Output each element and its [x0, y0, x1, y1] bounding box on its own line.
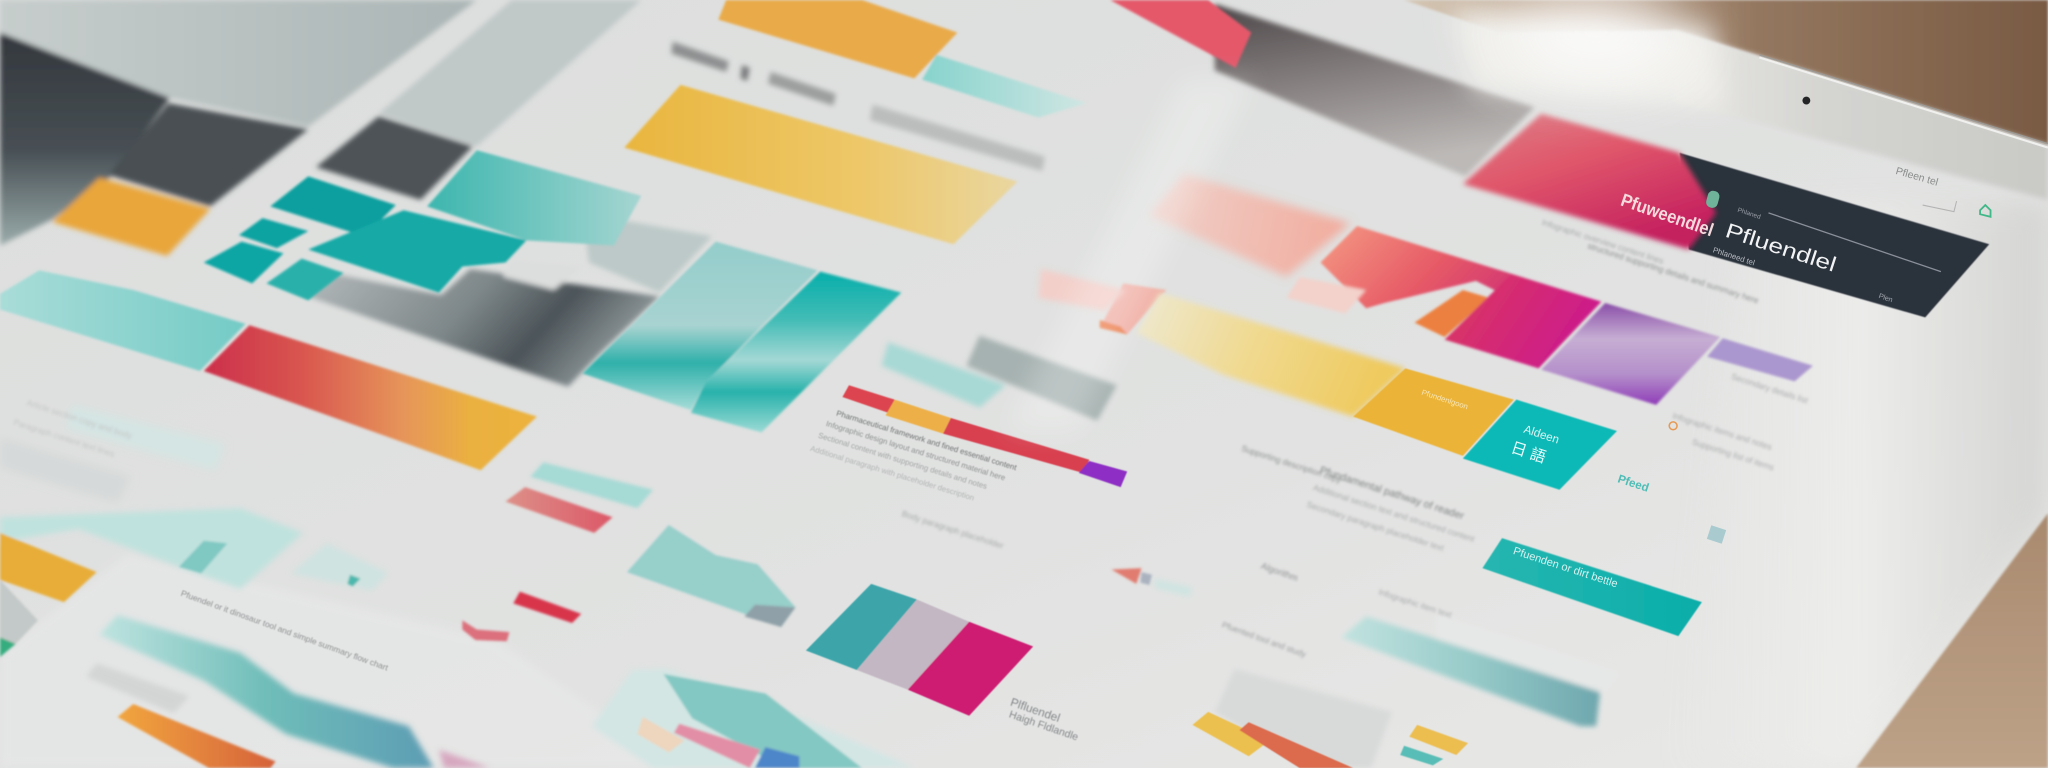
red orange bar: [1240, 722, 1353, 768]
panel: bottom right stacked bars: [1192, 712, 1468, 768]
magenta column: [908, 622, 1033, 716]
panel: left article group: [0, 0, 477, 256]
teal tag: [1400, 746, 1443, 765]
heading: blurred labels: [671, 42, 1045, 171]
pale salmon block: [1149, 174, 1351, 277]
yellow segment: [886, 400, 951, 434]
glare: screen sheen: [1006, 78, 1254, 431]
green tick: [0, 637, 16, 657]
teal tile small b: [204, 242, 283, 283]
panel: mini charts lower centre: [462, 462, 1192, 641]
text: teal tile figure: 日 語: [1509, 439, 1548, 467]
panel: centre-left column photos: [316, 0, 641, 200]
icon: small teal square: [1707, 525, 1726, 544]
amber block: [1353, 368, 1514, 456]
text: teal tile caption: Aldeen: [1522, 423, 1561, 446]
pale teal strip: [922, 55, 1087, 118]
purple block: [1541, 303, 1720, 405]
text block: blurred body copy: Secondary paragraph placeholder text: [1306, 499, 1446, 553]
purple segment: [1079, 461, 1127, 487]
hero dark navy half: [1680, 153, 1989, 317]
panel: teal mosaic: [204, 150, 641, 300]
teal peak: [664, 674, 862, 768]
yellow fade block: [1136, 293, 1405, 417]
text block: blurred body copy: Article section copy and body: [26, 397, 134, 441]
pale text card: [1287, 277, 1366, 313]
hero rule: [1768, 213, 1941, 272]
pink block: [674, 724, 760, 768]
red orange gradient band: [204, 325, 537, 470]
teal blip: [347, 575, 360, 586]
hero dark photo: [0, 33, 170, 246]
yellow bar: [1192, 712, 1270, 756]
gray photo strip: [379, 0, 641, 146]
teal tile large fade: [427, 150, 641, 246]
large yellow block: [624, 85, 1017, 244]
text block: stacked column caption: Haigh Fldlandle: [1007, 709, 1080, 744]
hero small label: Phlaneed tel: [1712, 245, 1756, 268]
icon: green tag: [1705, 190, 1721, 209]
text block: blurred body copy: Supporting list of items: [1691, 436, 1775, 472]
panel: right screen shading: [1672, 202, 2048, 768]
panel: gradient coral and purple row: [1038, 174, 1813, 405]
panel: stacked column trio: [806, 584, 1033, 716]
text block: progress bar description: Additional paragraph with placeholder description: [809, 444, 975, 503]
pale base: [592, 669, 914, 768]
panel: right lower teal chart: [1215, 614, 1620, 768]
darker teal tile: [179, 541, 227, 573]
pale teal chart: [0, 508, 303, 589]
teal band: [1341, 616, 1600, 726]
bezel edge highlight: [1759, 55, 2048, 148]
text block: blurred body copy: Pfuented tool and study: [1221, 619, 1308, 660]
pale mini chart: [291, 543, 388, 590]
orange caption block: [52, 178, 210, 256]
panel: striped progress bar: [842, 385, 1127, 487]
text block: blurred body copy: Secondary details list: [1730, 371, 1810, 406]
panel: wooden table bottom right: [1856, 513, 2048, 768]
amber bar: [0, 533, 97, 602]
note bracket: [1923, 201, 1957, 212]
orange small block: [1415, 290, 1489, 337]
glare: window light: [1505, 0, 1688, 76]
icon: tiny orange swirl: [1669, 422, 1677, 430]
red segment: [842, 385, 895, 413]
panel: top yellow header blocks: [624, 0, 1087, 244]
text block: blurred body copy: Paragraph content text lines: [12, 417, 116, 459]
text block: blurred body copy: Algorithm: [1260, 561, 1299, 583]
panel: red to orange banner: [0, 270, 537, 470]
tiny red mark: [1112, 568, 1142, 584]
pale end: [1155, 579, 1192, 597]
pale highlight block: [503, 260, 583, 290]
panel: hero banner: [1463, 114, 1989, 317]
crimson segment: [943, 418, 1089, 473]
mini chart red: [505, 487, 613, 533]
text block: blurred body copy: Infographic items and notes: [1671, 410, 1773, 452]
text block: progress bar description: Infographic design layout and structured material here: [825, 419, 1006, 482]
text block: progress bar description: [809, 409, 1019, 503]
text: callout label: Pfuenden or dirt bettle: [1512, 545, 1619, 590]
hero red half: [1463, 114, 1716, 249]
teal column: [806, 584, 917, 670]
text block: blurred body copy: [12, 217, 1810, 660]
pale photo block: [583, 213, 712, 293]
pale red text lines: [1038, 269, 1126, 311]
panel: gray photo collage: [308, 213, 712, 387]
gray stub: [0, 580, 38, 644]
text: amber block caption: Pfundenlgoon: [1420, 388, 1469, 411]
pink fragment: [439, 750, 490, 768]
panel: tall teal columns: [583, 242, 901, 432]
panel: bottom rainbow chart: [592, 669, 914, 768]
text block: blurred body copy: structured supporting details and summary here: [1586, 241, 1760, 306]
mini chart teal: [530, 462, 653, 508]
gray card: [86, 664, 189, 713]
text block: stacked column caption: Plfluendel: [1009, 696, 1062, 725]
hero mini label: Phlaned: [1737, 207, 1762, 221]
teal tile small a: [239, 218, 308, 248]
panel: lower left wave: [86, 615, 490, 768]
peach block: [637, 717, 684, 752]
text block: blurred body copy: Supporting description copy: [1240, 443, 1343, 485]
text block: top right note: Pfleen tel: [1894, 166, 1939, 189]
text block: progress bar description: Pharmaceutical framework and fined essential content: [835, 409, 1019, 472]
orange block: [718, 0, 957, 78]
dark photo strip: [316, 116, 473, 200]
teal tile caption: [270, 176, 396, 236]
icon: green home: [1980, 205, 1991, 217]
hero sky photo: [0, 0, 477, 127]
wide gray photo: [308, 269, 660, 387]
icon: tablet camera: [1802, 97, 1810, 104]
teal tile small c: [266, 259, 344, 300]
mauve column: [857, 600, 969, 690]
orange diagonal: [118, 704, 276, 768]
tall teal column right: [691, 272, 901, 432]
panel: pale teal gray mini chart: [882, 336, 1117, 421]
mountain chart: [627, 525, 795, 627]
panel: yellow band with teal tile: [1136, 293, 1617, 490]
panel: tablet bezel: [1674, 30, 2048, 200]
tiny gray mark: [1140, 572, 1152, 585]
teal tile: [1463, 400, 1617, 490]
panel: teal callout banner: [1482, 538, 1702, 636]
hero title: Pfuweendlel: [1618, 189, 1717, 240]
text block: blurred body copy: Additional section text and structured content: [1312, 482, 1476, 544]
lilac tag: [1707, 338, 1813, 381]
pale top: [1437, 614, 1620, 692]
red tag: [513, 592, 581, 623]
hero subtitle: Pfluendlel: [1723, 219, 1839, 277]
panel: wooden table top right: [1404, 0, 2048, 145]
pale teal band: [0, 270, 246, 371]
coral magenta block: [1320, 226, 1601, 313]
pale red side block: [1100, 283, 1166, 334]
mountain base: [744, 605, 795, 627]
text block: blurred body copy: Pfundamental pathway of reader: [1318, 465, 1466, 522]
panel: lower left pale chart with amber bar: [0, 508, 388, 657]
blue block: [755, 747, 799, 768]
magenta block: [1445, 274, 1601, 368]
panel: white page card lower left: [0, 554, 679, 768]
panel: pink corner page: [1110, 0, 1251, 68]
text block: blurred body copy: Infographic item text: [1377, 587, 1454, 620]
text block: blurred body copy: Body paragraph placeholder: [901, 508, 1005, 551]
text block: lower left caption: Pfuendel or it dinosaur tool and simple summary flow chart: [180, 588, 390, 673]
text: teal mini label: Pfeed: [1616, 472, 1651, 495]
teal tile wide: [308, 210, 526, 293]
tall teal column left: [583, 242, 818, 410]
panel: top dark photo band: [1215, 4, 1535, 176]
panel: pale block lower left: [0, 405, 225, 503]
wave band: [99, 615, 434, 768]
yellow tag: [1409, 725, 1468, 755]
orange tip: [1100, 320, 1127, 334]
text block: blurred body copy: Infographic overview content lines: [1541, 217, 1665, 266]
gray card: [1215, 669, 1392, 768]
text block: progress bar description: Sectional content with supporting details and notes: [817, 431, 988, 491]
glare: soft bezel bloom: [1450, 10, 1724, 107]
hero corner mark: Plen: [1878, 292, 1894, 304]
dark caption block: [108, 103, 308, 206]
tiny colour icon: [462, 620, 509, 641]
